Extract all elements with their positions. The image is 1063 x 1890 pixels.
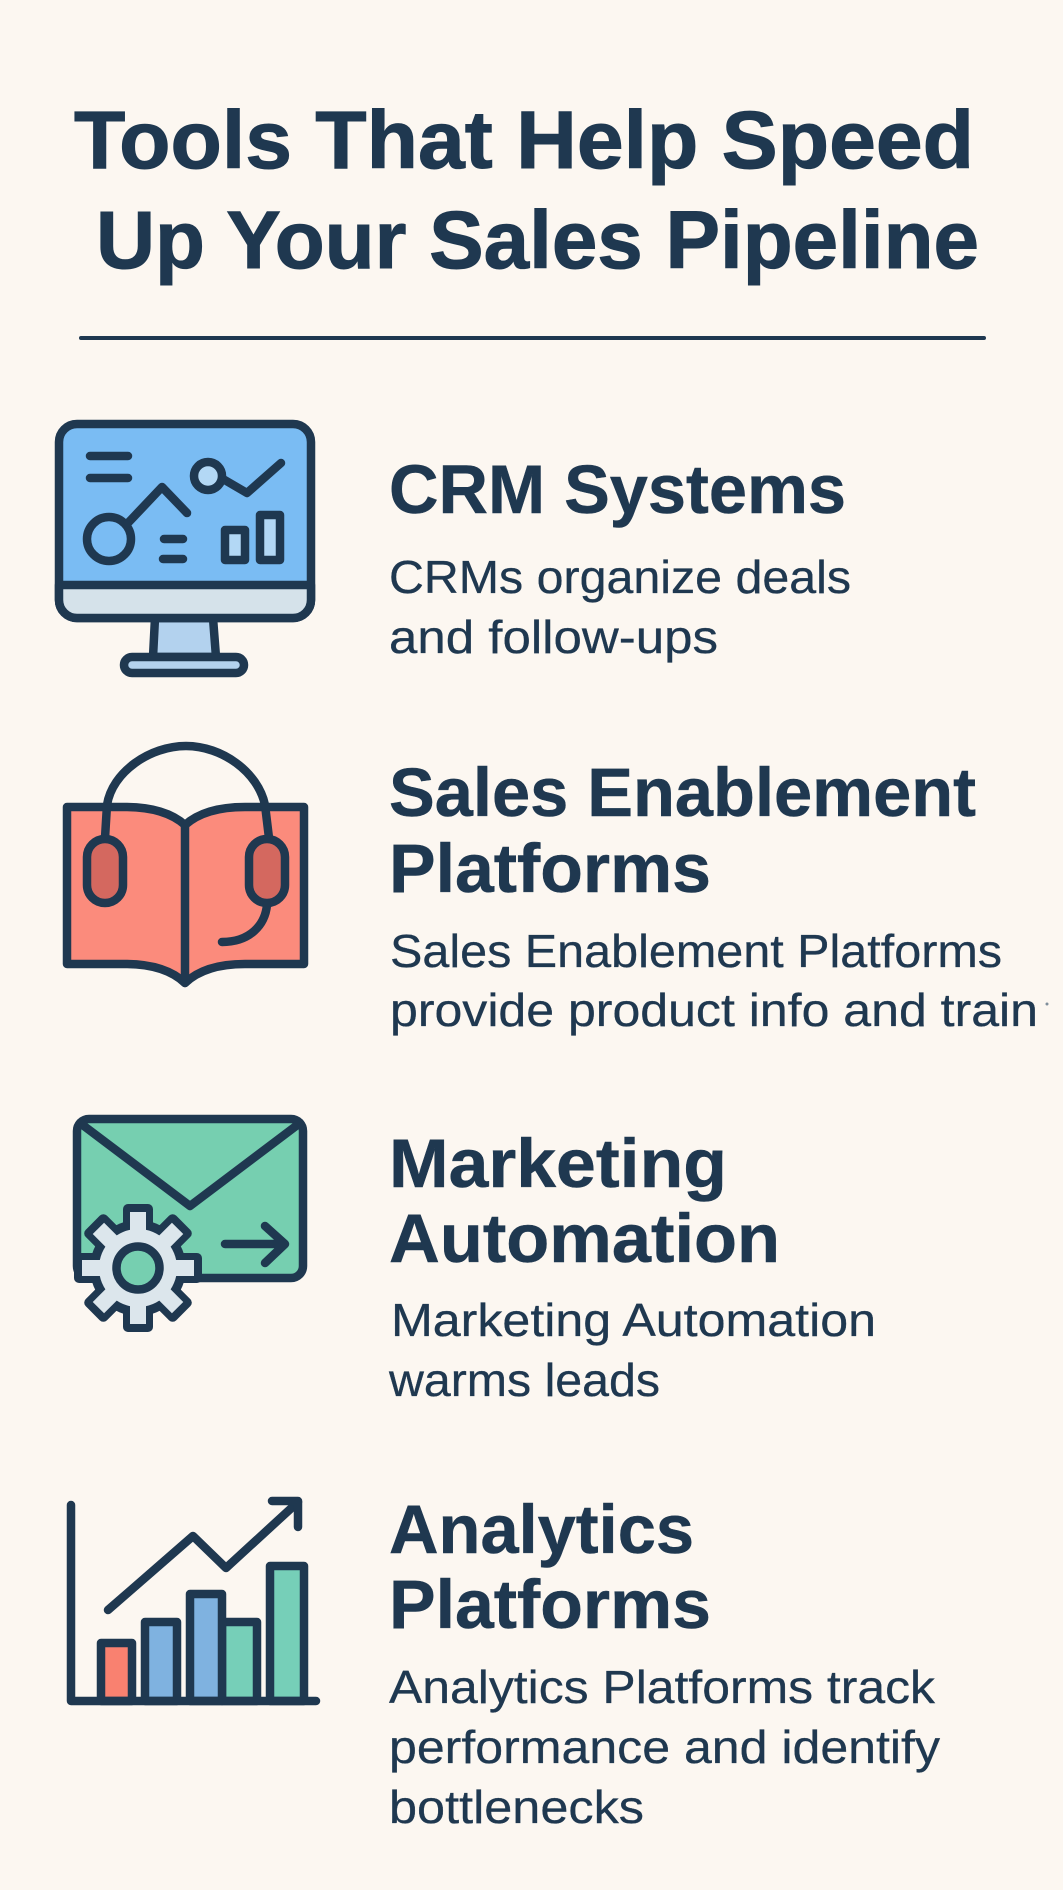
heading: Marketing Automation	[389, 1125, 780, 1277]
description: Analytics Platforms	[389, 1661, 940, 1833]
heading: Sales Enablement Platforms	[389, 754, 976, 907]
heading: Analytics Platforms	[389, 1491, 711, 1643]
heading: Analytics Platforms: Analytics	[389, 1491, 694, 1568]
heading: Analytics Platforms: Platforms	[389, 1566, 711, 1643]
description: Sales Enablement Platforms: provide product info and train	[390, 984, 1038, 1036]
heading: Marketing Automation: Automation	[389, 1200, 780, 1277]
title: Tools That Help Speed	[74, 95, 974, 186]
icon: open book with headset	[67, 746, 304, 983]
description: CRM Systems: CRMs organize deals	[389, 551, 851, 603]
description: CRM Systems	[389, 551, 851, 663]
icon: analytics bar chart with rising arrow	[71, 1501, 316, 1701]
heading: CRM Systems: CRM Systems	[389, 451, 846, 528]
heading: Marketing Automation: Marketing	[389, 1125, 727, 1202]
description: Analytics Platforms: bottlenecks	[389, 1781, 644, 1833]
icon: CRM monitor dashboard	[59, 424, 311, 673]
description: Marketing Automation	[388, 1294, 876, 1406]
description: Marketing Automation: Marketing Automation	[391, 1294, 876, 1346]
description: CRM Systems: and follow-ups	[389, 611, 718, 663]
description: Sales Enablement Platforms: Sales Enablement Platforms	[390, 925, 1002, 977]
heading: Sales Enablement Platforms: Sales Enablement	[389, 754, 976, 831]
icon: envelope with gear and arrow	[74, 1119, 303, 1332]
title	[74, 95, 979, 286]
heading: Sales Enablement Platforms: Platforms	[389, 830, 711, 907]
title: Up Your Sales Pipeline	[96, 195, 979, 286]
description: Analytics Platforms: Analytics Platforms track	[389, 1661, 936, 1713]
description: Sales Enablement Platforms	[390, 925, 1038, 1036]
description: Analytics Platforms: performance and identify	[389, 1721, 940, 1773]
description: Marketing Automation: warms leads	[388, 1354, 660, 1406]
